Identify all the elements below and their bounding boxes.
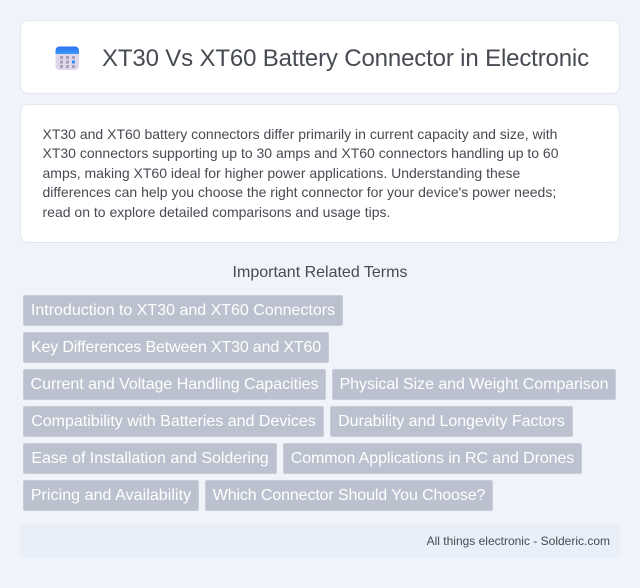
chip [23,369,326,400]
related terms heading: Important Related Terms [233,264,407,281]
chip: Pricing and Availability [31,487,191,504]
chip: Compatibility with Batteries and Devices [31,413,316,430]
chip: Durability and Longevity Factors [338,413,565,430]
intro text [42,126,559,220]
chip: Key Differences Between XT30 and XT60 [31,339,321,356]
intro text: amps, making XT60 ideal for higher power applications. Understanding these [42,165,520,181]
footer bar [20,524,620,558]
intro text: differences can help you choose the right connector for your device's power needs; [42,184,556,200]
chip [330,406,573,437]
chip [23,443,277,474]
chip [23,480,199,511]
chip: Current and Voltage Handling Capacities [31,376,318,393]
intro text: read on to explore detailed comparisons and usage tips. [42,204,390,220]
chip: Physical Size and Weight Comparison [340,376,608,393]
icon: calendar [56,46,79,70]
chip [23,406,324,437]
chip [23,295,343,326]
related terms chips [23,295,616,511]
intro panel [20,104,620,243]
chip: Ease of Installation and Soldering [31,450,269,467]
title: XT30 Vs XT60 Battery Connector in Electronic [102,45,589,72]
chip [332,369,616,400]
chip: Common Applications in RC and Drones [291,450,574,467]
chip: Introduction to XT30 and XT60 Connectors [31,302,335,319]
footer text: All things electronic - Solderic.com [427,534,610,548]
chip: Which Connector Should You Choose? [213,487,485,504]
header panel [20,20,620,94]
chip [205,480,493,511]
chip [23,332,329,363]
intro text: XT30 connectors supporting up to 30 amps and XT60 connectors handling up to 60 [42,145,559,161]
intro text: XT30 and XT60 battery connectors differ primarily in current capacity and size, with [42,126,557,142]
chip [283,443,582,474]
